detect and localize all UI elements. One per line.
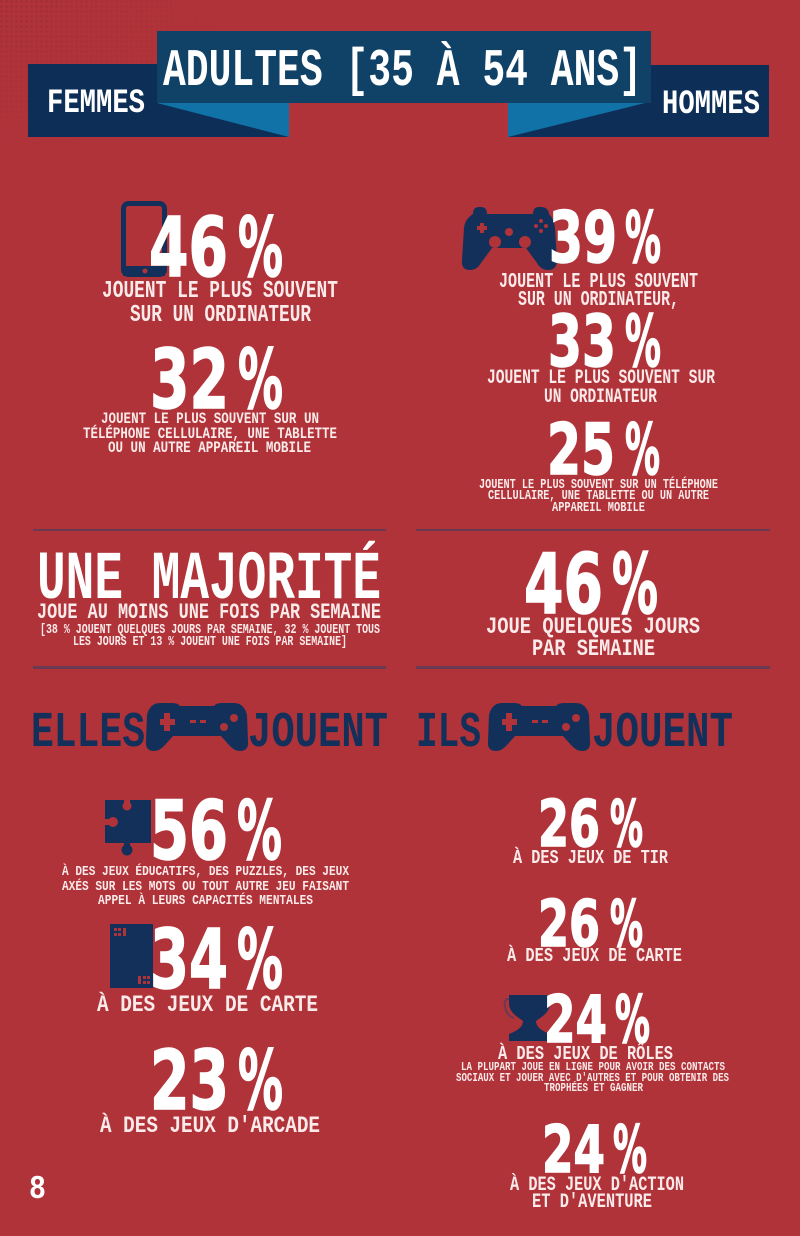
number: 23	[150, 1034, 229, 1129]
caption	[510, 1173, 684, 1214]
text: jouent: JOUENT	[248, 705, 388, 762]
frequency: hommes	[486, 536, 700, 662]
number: 34	[150, 913, 228, 1008]
text: jouent: JOUENT	[592, 705, 733, 762]
number: %	[237, 913, 283, 1008]
detail: LES JOURS ET 13 % JOUENT UNE FOIS PAR SEMAINE]	[73, 634, 347, 650]
caption: ET D'AVENTURE	[532, 1191, 652, 1214]
number: 39	[549, 197, 617, 279]
number: 25	[547, 409, 615, 491]
caption: APPAREIL MOBILE	[552, 500, 645, 516]
caption	[62, 862, 349, 909]
caption: JOUE AU MOINS UNE FOIS PAR SEMAINE	[37, 600, 381, 625]
icon: trophy	[505, 995, 550, 1041]
icon: tablet	[123, 204, 165, 276]
caption: À DES JEUX D'ARCADE	[100, 1112, 320, 1139]
detail	[456, 1060, 729, 1095]
stat: ils 26% carte	[507, 888, 682, 967]
number: 56	[150, 785, 228, 879]
icon: gamepad	[462, 207, 557, 270]
stat: ils 26% tir	[513, 788, 668, 869]
ribbon: right tail panel	[508, 100, 645, 137]
stat: femmes 32% mobile	[83, 333, 337, 457]
caption: JOUENT LE PLUS SOUVENT SUR	[487, 367, 715, 390]
number: %	[625, 197, 661, 279]
ribbon: left tail panel	[157, 100, 289, 137]
heading: elles jouent	[31, 703, 388, 762]
text: elles: ELLES	[31, 705, 145, 762]
caption	[479, 475, 718, 516]
banner	[28, 31, 769, 137]
frequency: femmes	[37, 541, 381, 650]
caption	[83, 410, 337, 457]
number: %	[615, 983, 650, 1058]
number: 32	[150, 333, 229, 428]
page number: 8	[29, 1171, 46, 1208]
number: 46	[149, 201, 228, 296]
caption: À DES JEUX DE TIR	[513, 847, 668, 869]
caption: JOUENT LE PLUS SOUVENT SUR UN TÉLÉPHONE	[479, 475, 718, 493]
stat: elles 56%	[62, 785, 349, 909]
icon: gamepad	[146, 703, 248, 751]
number: 24	[542, 1113, 605, 1188]
stat: elles 23%	[100, 1034, 320, 1139]
caption: À DES JEUX DE CARTE	[507, 945, 682, 967]
number: 33	[548, 300, 616, 383]
detail: [38 % JOUENT QUELQUES JOURS PAR SEMAINE, 32 % JOUENT TOUS	[40, 622, 380, 638]
caption: UN ORDINATEUR	[544, 386, 657, 409]
ribbon: left tail	[28, 64, 159, 137]
number: %	[625, 300, 661, 383]
caption: SUR UN ORDINATEUR	[130, 302, 311, 329]
icon: gamepad	[488, 703, 590, 751]
number: %	[610, 888, 643, 962]
number: %	[612, 536, 658, 633]
caption: CELLULAIRE, UNE TABLETTE OU UN AUTRE	[488, 488, 709, 504]
text: ils: ILS	[416, 705, 481, 762]
number: %	[238, 201, 283, 296]
caption	[499, 271, 698, 312]
detail	[40, 622, 380, 650]
caption: JOUENT LE PLUS SOUVENT	[499, 271, 698, 294]
stat: ils 24% action	[510, 1113, 684, 1214]
number: %	[610, 788, 643, 862]
caption: APPEL À LEURS CAPACITÉS MENTALES	[98, 891, 313, 909]
caption: JOUENT LE PLUS SOUVENT SUR UN	[101, 410, 319, 428]
stat: elles 34%	[97, 913, 318, 1018]
ribbon: right fold	[508, 103, 645, 137]
detail: LA PLUPART JOUE EN LIGNE POUR AVOIR DES CONTACTS	[461, 1060, 725, 1074]
caption: À DES JEUX DE CARTE	[97, 991, 318, 1018]
caption: JOUENT LE PLUS SOUVENT	[102, 278, 338, 305]
headline: UNE MAJORITÉ	[37, 541, 381, 619]
caption: À DES JEUX D'ACTION	[510, 1173, 684, 1197]
heading: ils jouent	[416, 703, 733, 762]
caption: À DES JEUX ÉDUCATIFS, DES PUZZLES, DES JEUX	[62, 862, 349, 880]
ribbon: right tail	[640, 65, 769, 137]
number: 24	[544, 983, 607, 1058]
caption: PAR SEMAINE	[532, 636, 655, 662]
stat: ils 24% roles	[456, 983, 729, 1095]
number: 26	[538, 788, 600, 862]
number: %	[238, 1034, 283, 1129]
ribbon: left fold	[157, 103, 289, 137]
heading: hommes: HOMMES	[662, 86, 760, 124]
heading: femmes: FEMMES	[47, 85, 145, 123]
caption	[102, 278, 338, 329]
detail: TROPHÉES ET GAGNER	[544, 1080, 644, 1095]
caption	[486, 614, 700, 662]
stat: hommes 25% mobile: %	[625, 409, 660, 491]
stat: hommes 33% ordinateur	[487, 300, 715, 409]
caption	[487, 367, 715, 409]
number: %	[613, 1113, 647, 1188]
caption: JOUE QUELQUES JOURS	[486, 614, 700, 640]
caption: À DES JEUX DE RÔLES	[498, 1043, 673, 1065]
number: 26	[538, 888, 600, 962]
stat: femmes 46% ordinateur	[102, 201, 338, 329]
caption: OU UN AUTRE APPAREIL MOBILE	[108, 439, 311, 457]
stat: hommes 39% ordinateur	[462, 197, 698, 312]
caption: SUR UN ORDINATEUR,	[518, 289, 679, 312]
icon: puzzle piece	[104, 799, 151, 856]
icon: playing card	[110, 924, 153, 988]
number: 46	[524, 536, 603, 633]
ribbon: main panel	[157, 31, 651, 103]
caption: TÉLÉPHONE CELLULAIRE, UNE TABLETTE	[83, 424, 337, 443]
number: %	[238, 333, 283, 428]
caption: AXÉS SUR LES MOTS OU TOUT AUTRE JEU FAISANT	[62, 877, 349, 895]
stat: hommes 25% mobile	[479, 409, 718, 516]
number: %	[237, 785, 282, 879]
